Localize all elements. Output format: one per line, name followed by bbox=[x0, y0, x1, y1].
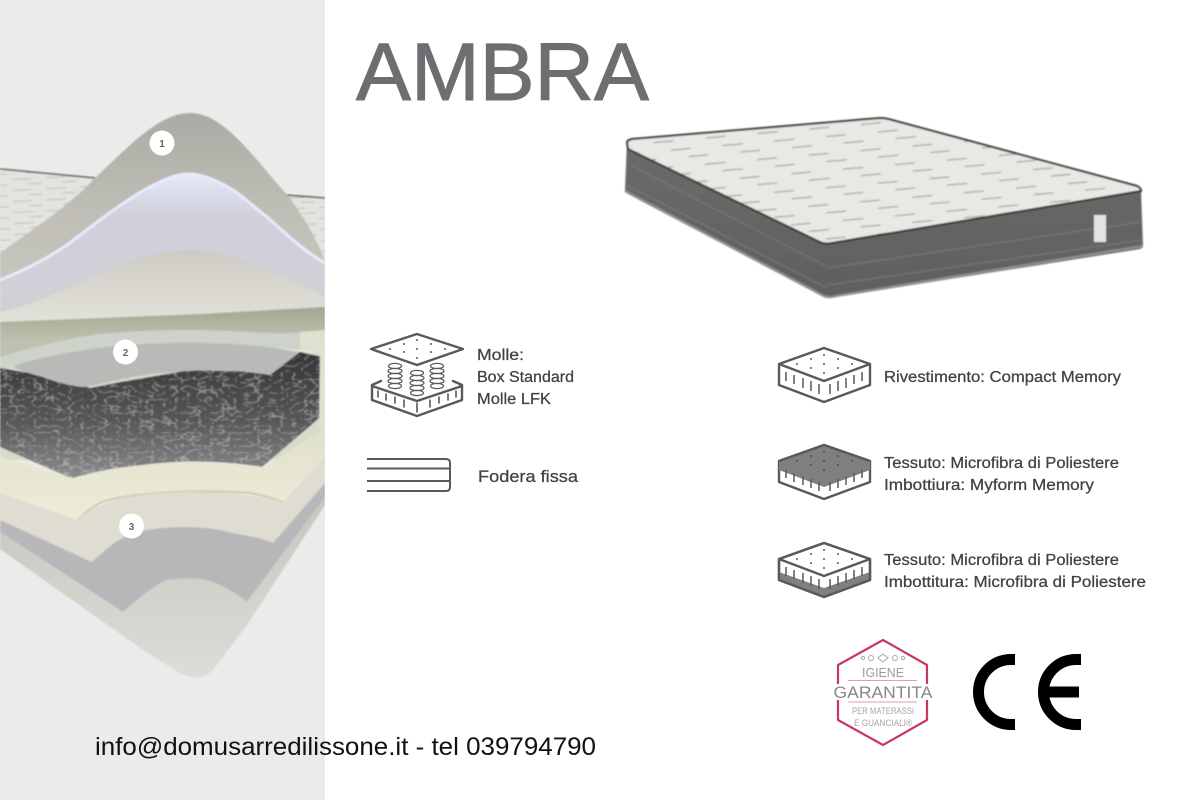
text: springs: Box Standard bbox=[477, 369, 574, 386]
badge: hygiene guaranteed: E GUANCIALI® bbox=[854, 718, 912, 728]
title: AMBRA bbox=[356, 27, 649, 118]
layer: cream latex foam bbox=[0, 442, 324, 520]
text: bottom layer bbox=[884, 552, 1146, 591]
mattress product image bbox=[625, 118, 1143, 298]
contact line: info@domusarredilissone.it - tel 039794790 bbox=[95, 733, 596, 761]
layer: top fabric bbox=[0, 112, 324, 278]
marker 3 bbox=[119, 514, 144, 538]
layer: grey wadding bbox=[13, 343, 300, 387]
layer: beige lining bbox=[0, 250, 325, 322]
mattress label bbox=[1094, 215, 1106, 242]
marker 2 bbox=[113, 340, 138, 364]
badge: hygiene guaranteed: IGIENE bbox=[862, 665, 904, 680]
layer: white foam bbox=[0, 174, 325, 312]
mattress top bbox=[627, 118, 1141, 244]
badge: hygiene guaranteed bbox=[830, 640, 936, 745]
layer: grey foam bbox=[0, 483, 325, 612]
text: springs: Molle: bbox=[477, 347, 524, 364]
text: fixed cover: Fodera fissa bbox=[478, 467, 579, 486]
text: top layer bbox=[884, 455, 1119, 494]
icon: covering bbox=[779, 348, 870, 402]
marker 1: 1 bbox=[159, 139, 165, 150]
text: springs: Molle LFK bbox=[477, 391, 552, 408]
text: covering: Rivestimento: Compact Memory bbox=[884, 369, 1121, 386]
icon: fixed cover bbox=[367, 459, 450, 491]
badge: hygiene guaranteed: PER MATERASSI bbox=[852, 706, 914, 716]
text: top layer: Tessuto: Microfibra di Poliestere bbox=[884, 455, 1119, 472]
text: bottom layer: Imbottitura: Microfibra di Poliestere bbox=[884, 574, 1146, 591]
marker 2: 2 bbox=[123, 348, 129, 359]
marker 3: 3 bbox=[129, 522, 135, 533]
layer: padding beige bbox=[0, 457, 325, 562]
icon: bottom layer bbox=[779, 543, 870, 597]
icon: top layer bbox=[779, 445, 870, 499]
badge: hygiene guaranteed: GARANTITA bbox=[834, 683, 933, 702]
layer: dark spring unit bbox=[0, 352, 323, 479]
icon: springs bbox=[371, 334, 463, 416]
panel: mattress layers cross-section bbox=[0, 0, 325, 800]
text: springs bbox=[477, 347, 574, 408]
layer: green foam band bbox=[0, 307, 325, 340]
text: top layer: Imbottiura: Myform Memory bbox=[884, 477, 1094, 494]
logo: CE mark bbox=[978, 660, 1081, 724]
text: bottom layer: Tessuto: Microfibra di Poliestere bbox=[884, 552, 1119, 569]
marker 1 bbox=[150, 130, 174, 156]
layer: bottom fabric bbox=[0, 497, 325, 678]
